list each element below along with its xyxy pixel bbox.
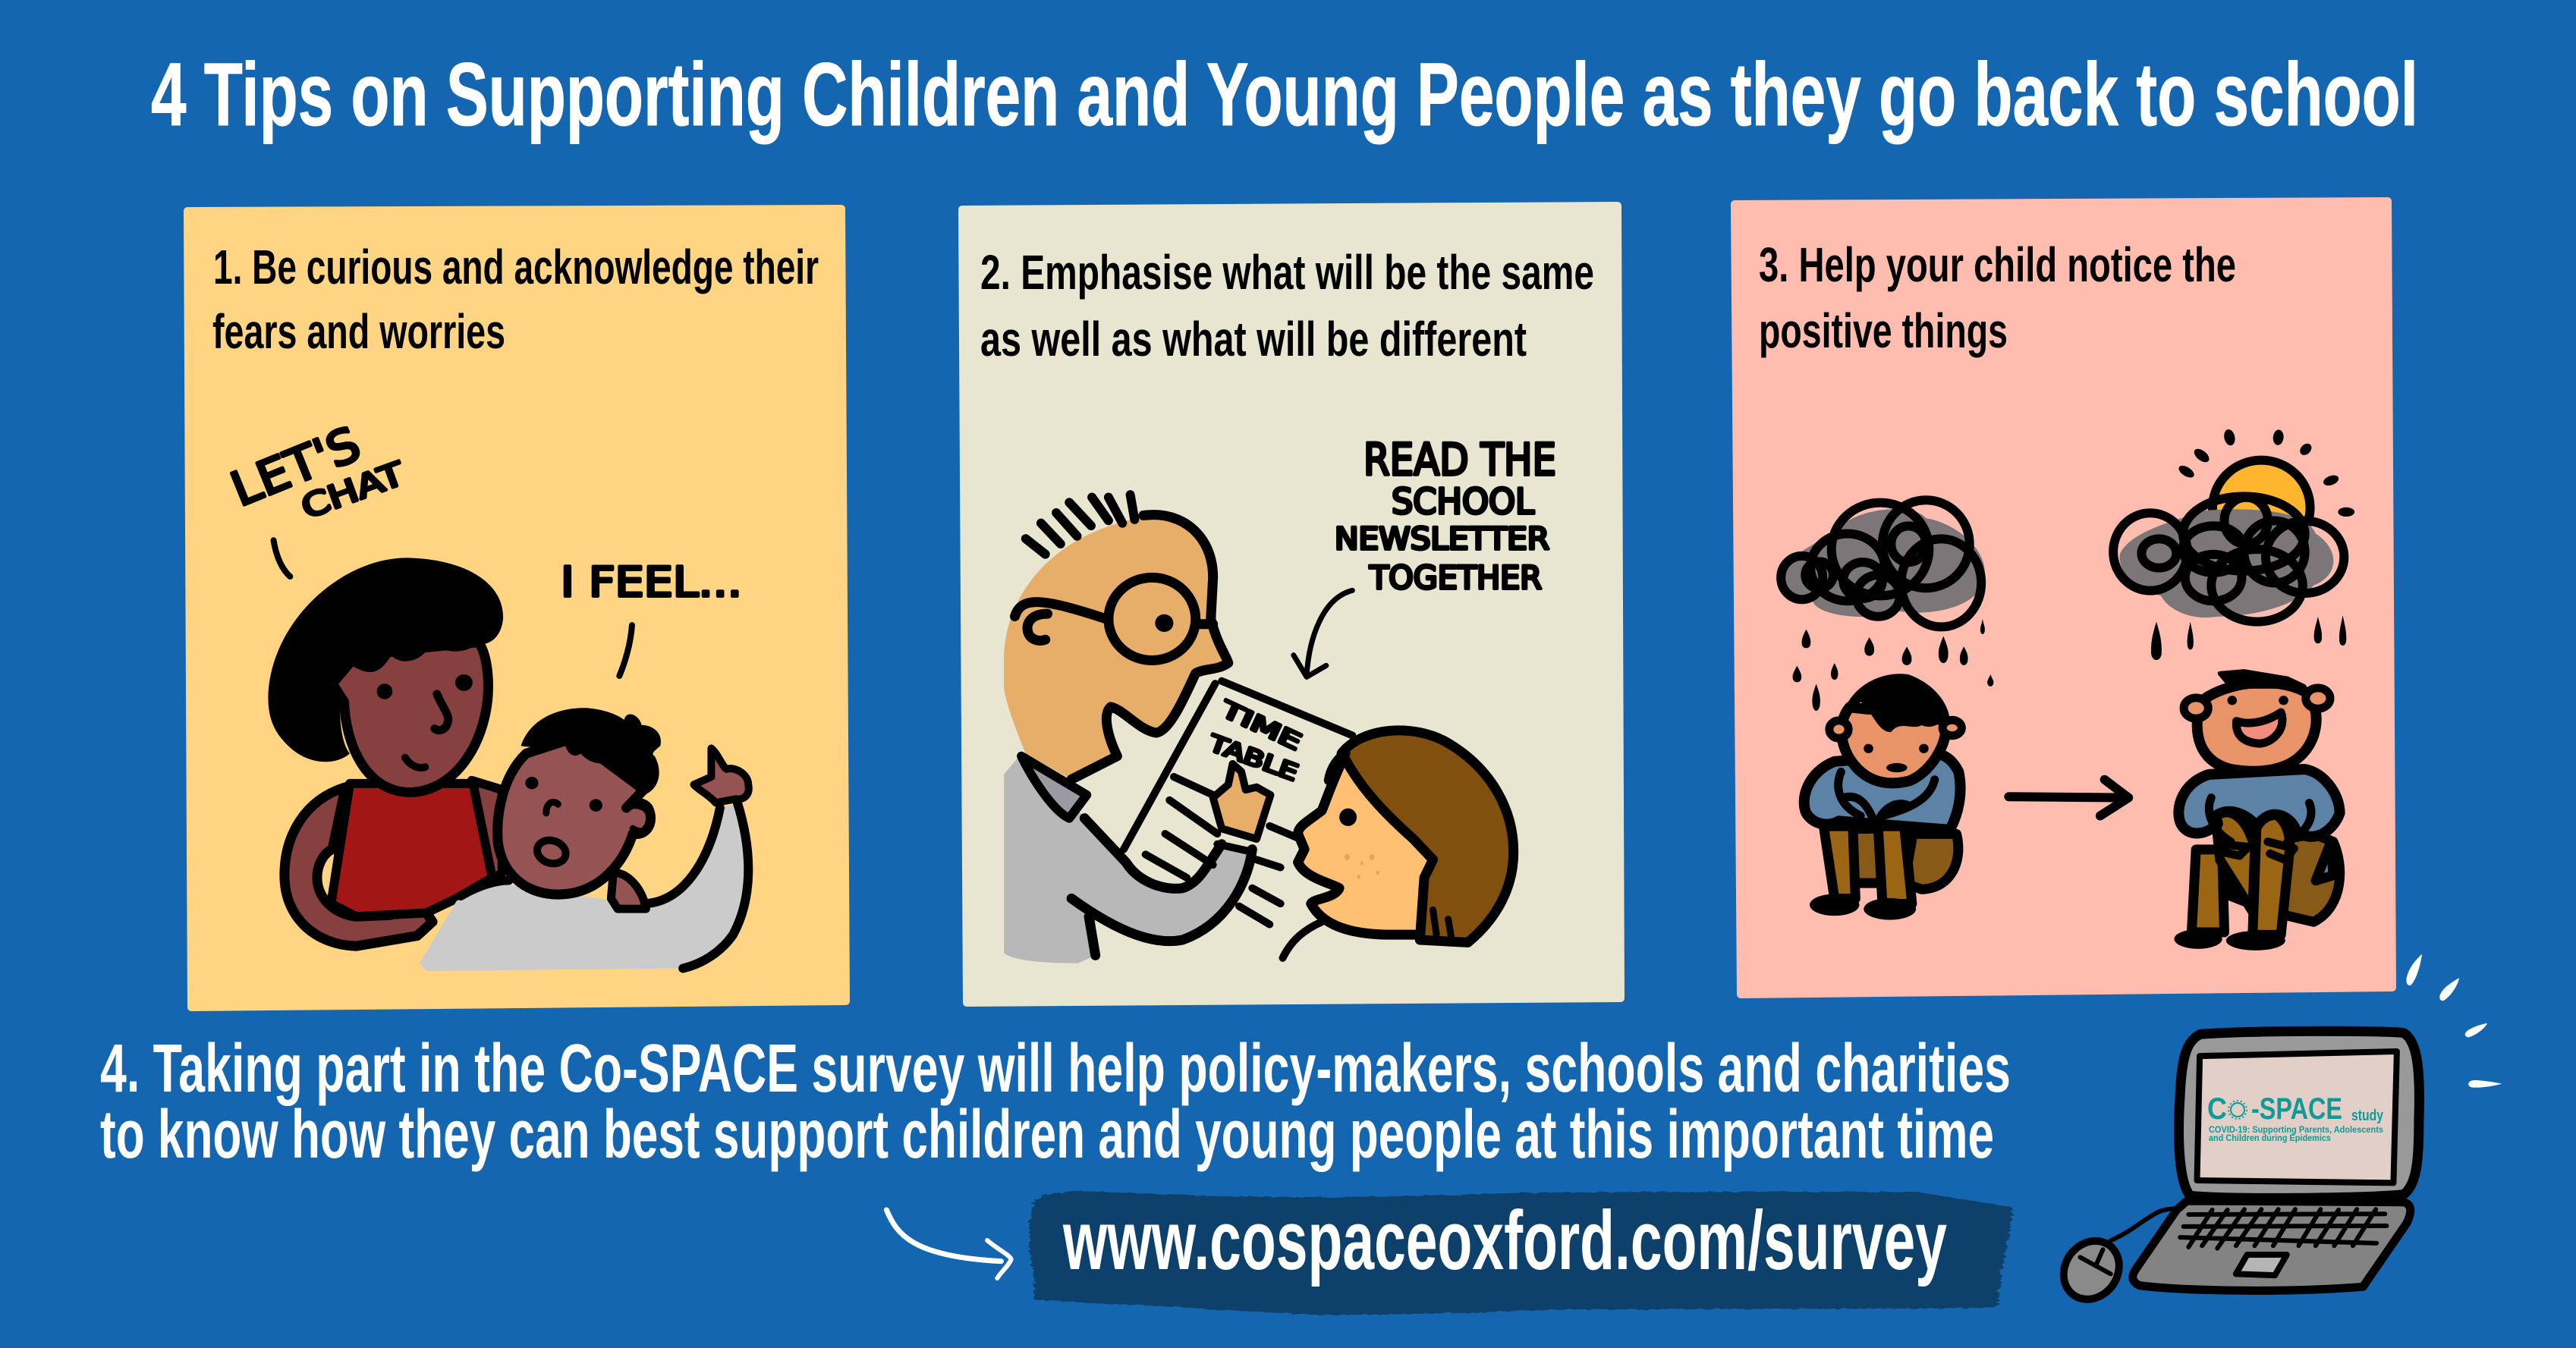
mouse cord (2111, 1208, 2177, 1240)
happy child sweater (2178, 769, 2340, 837)
timetable label: TIME (1216, 696, 1305, 756)
happy child arms and hands (2209, 798, 2311, 859)
sad child ears (1829, 720, 1961, 738)
child hair (521, 708, 661, 795)
illustration: father and child reading timetable (1004, 495, 1514, 963)
sad child head (1842, 707, 1945, 783)
screen logo: COVID-19: Supporting Parents, Adolescents (2209, 1124, 2383, 1135)
wristband (1217, 844, 1252, 852)
speech: read the school newsletter together: NEWSLETTER (1335, 522, 1549, 557)
lid (2179, 1031, 2419, 1198)
url banner (886, 1191, 2013, 1315)
sad child face (1864, 744, 1929, 772)
sad child shoes (1810, 894, 1916, 920)
parent face (332, 643, 488, 793)
card 1 heading (212, 240, 819, 359)
card 1 heading: fears and worries (212, 304, 505, 359)
card 2 background (958, 202, 1625, 1007)
child features (525, 777, 650, 866)
hair ticks (1026, 495, 1134, 555)
speech: let's chat: LET'S (223, 416, 368, 517)
sad child sweater (1804, 754, 1961, 830)
head outline (1071, 515, 1228, 779)
parent features (377, 674, 473, 768)
sad child trousers (1823, 826, 1958, 903)
pupil (1155, 614, 1173, 632)
rain cloud scribble (1781, 500, 1981, 627)
card 2 heading: as well as what will be different (980, 312, 1527, 366)
blanket outlines (461, 803, 748, 969)
illustration: rain to sunshine (1781, 428, 2354, 951)
speech: read the school newsletter together: SCHOOL (1392, 481, 1534, 522)
arm sleeve outline (1071, 819, 1252, 955)
sun cloud drops (2151, 615, 2346, 660)
child head (498, 738, 651, 894)
url text: www.cospaceoxford.com/survey (1062, 1194, 1947, 1287)
panel 1: be curious (184, 205, 850, 1011)
card 3 background (1731, 197, 2396, 998)
arrow to url (886, 1210, 1011, 1278)
base (2133, 1201, 2411, 1290)
child details (1282, 753, 1452, 958)
icon: virus (2228, 1101, 2247, 1119)
attention dashes (2406, 954, 2502, 1088)
speech: read the school newsletter together (1335, 434, 1556, 596)
child blanket (420, 803, 750, 971)
happy child hair (2220, 671, 2304, 687)
sun rays (2177, 428, 2354, 517)
speech ticks (274, 540, 632, 676)
child small hand (611, 872, 646, 909)
sun (2213, 460, 2310, 555)
speech: i feel: I FEEL... (561, 558, 742, 606)
tip 4 text (100, 1031, 2011, 1173)
screen logo: C (2207, 1092, 2227, 1126)
card 3 heading: 3. Help your child notice the (1759, 237, 2236, 292)
speech: let's chat (223, 416, 409, 526)
child face (1298, 753, 1435, 935)
sun cloud fill (2120, 509, 2333, 617)
card 2 heading: 2. Emphasise what will be the same (980, 245, 1594, 300)
happy child head (2197, 683, 2317, 771)
timetable label (1204, 696, 1305, 787)
speech: let's chat: CHAT (297, 454, 409, 526)
card 3 heading: positive things (1759, 303, 2008, 358)
laptop drawing (2057, 1031, 2419, 1303)
parent red top (331, 784, 492, 916)
sad child arms (1838, 771, 1935, 826)
timetable label: TABLE (1204, 730, 1301, 787)
screen (2197, 1051, 2397, 1183)
collar (1021, 756, 1087, 819)
card 1 heading: 1. Be curious and acknowledge their (213, 240, 819, 294)
illustration: parent and child talking (268, 540, 750, 971)
icon: laptop with mouse (2057, 954, 2502, 1303)
head (1004, 516, 1228, 779)
card 3 heading (1759, 237, 2236, 358)
child hair (1341, 731, 1514, 942)
parent arm (285, 787, 432, 946)
happy child face (2228, 696, 2288, 743)
screen logo: -SPACE (2251, 1092, 2342, 1126)
happy child back and trousers (2191, 811, 2340, 935)
screen logo (2207, 1092, 2384, 1143)
body (1004, 753, 1252, 963)
speech: read the school newsletter together: READ THE (1363, 434, 1556, 485)
touchpad (2236, 1255, 2287, 1275)
rain cloud fill (1782, 509, 1985, 617)
glasses (1014, 577, 1213, 661)
screen logo: and Children during Epidemics (2209, 1133, 2331, 1143)
card 1 background (184, 205, 850, 1011)
pointing hand (1213, 764, 1270, 839)
sun cloud scribble (2113, 496, 2344, 622)
speech: read the school newsletter together: TOGETHER (1369, 559, 1542, 596)
card 2 heading (980, 245, 1594, 366)
timetable paper lines (1124, 681, 1352, 925)
arrow sad to happy (2008, 780, 2128, 815)
brush stroke (1029, 1191, 2013, 1315)
parent hair (268, 558, 503, 762)
rain drops (1793, 619, 1993, 711)
panel 2: same and different (958, 202, 1625, 1007)
child raised hand (694, 749, 749, 803)
keyboard (2180, 1209, 2387, 1249)
parent right shoulder (472, 781, 502, 883)
happy child ears (2184, 688, 2330, 718)
curved arrow (1294, 590, 1352, 677)
happy child shoes (2174, 929, 2285, 951)
panel 3: notice the positive (1731, 197, 2396, 998)
screen logo: study (2351, 1108, 2384, 1124)
sad child hair (1844, 674, 1950, 732)
mouse (2057, 1237, 2126, 1303)
